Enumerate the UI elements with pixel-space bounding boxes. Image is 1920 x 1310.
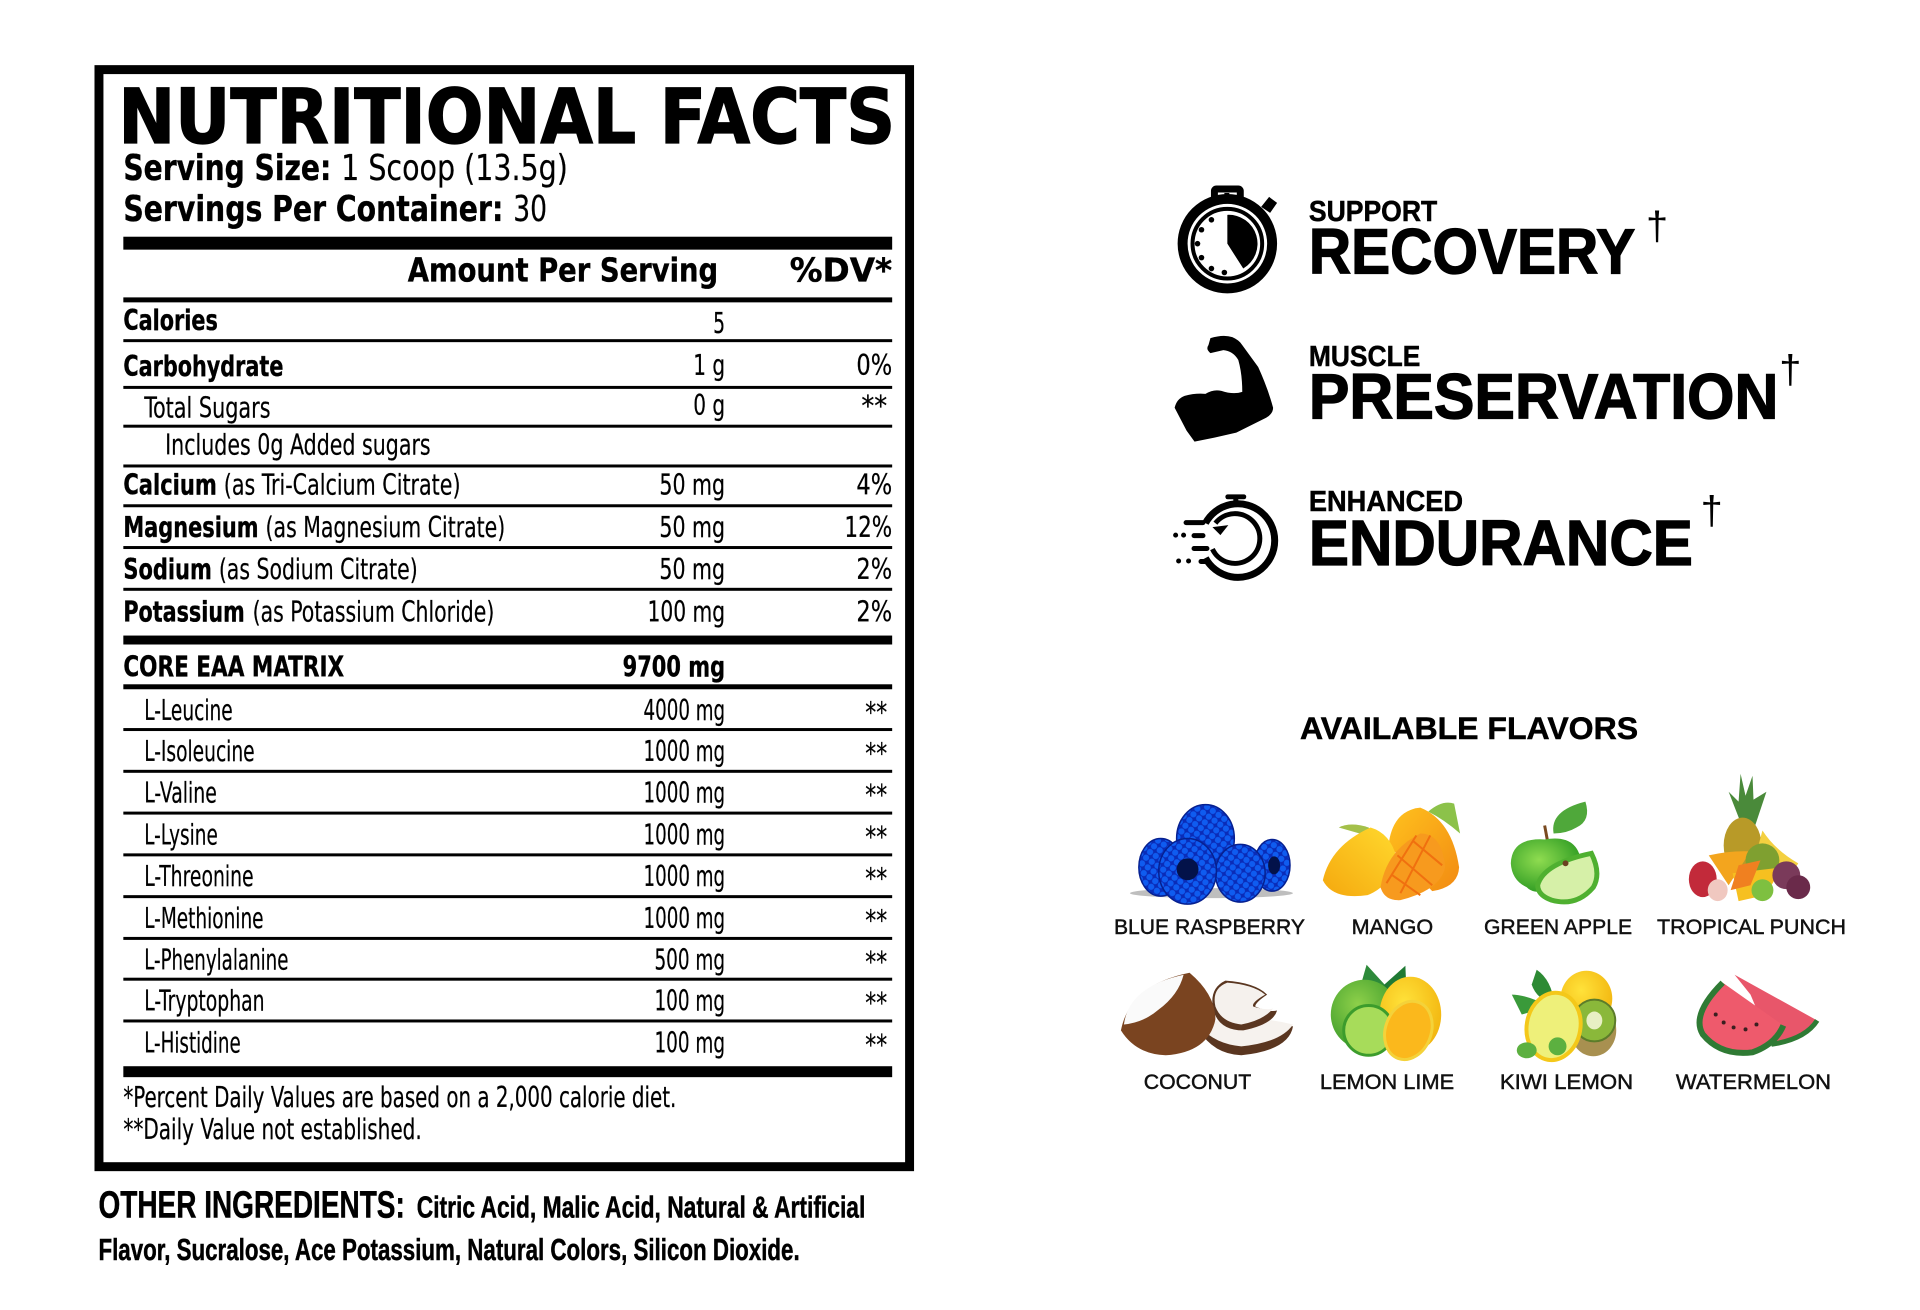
- benefit: support recovery: SUPPORT: [1309, 196, 1438, 228]
- core EAA matrix rows: L-Valine: [144, 776, 217, 810]
- serving info: [123, 148, 568, 230]
- table header: [408, 251, 892, 289]
- panel: nutritional facts: [99, 70, 910, 1167]
- core EAA matrix rows: L-Leucine: [144, 693, 233, 727]
- label: watermelon: WATERMELON: [1676, 1071, 1831, 1094]
- core EAA matrix rows: **: [865, 861, 887, 895]
- core EAA matrix rows: **: [865, 819, 887, 853]
- icon: stopwatch: [1183, 189, 1277, 288]
- nutrient rows: **: [861, 389, 887, 423]
- other ingredients: Flavor, Sucralose, Ace Potassium, Natural Colors, Silicon Dioxide.: [98, 1232, 800, 1267]
- core EAA matrix rows: **: [865, 986, 887, 1020]
- icon: blue raspberry: [1130, 805, 1293, 904]
- nutrient rows: (as Magnesium Citrate): [266, 510, 505, 544]
- nutrient rows: 2%: [856, 552, 892, 586]
- core EAA matrix rows: L-Methionine: [144, 901, 264, 935]
- footnotes: [123, 1080, 676, 1146]
- icon: green apple: [1511, 802, 1597, 902]
- nutrient rows: 4%: [856, 467, 892, 501]
- benefit: enhanced endurance: †: [1701, 489, 1723, 533]
- benefit: enhanced endurance: ENDURANCE: [1309, 508, 1693, 579]
- label: coconut: COCONUT: [1144, 1071, 1251, 1094]
- core EAA matrix rows: [123, 649, 887, 1061]
- other ingredients: Citric Acid, Malic Acid, Natural & Artificial: [417, 1189, 865, 1224]
- nutrient rows: Total Sugars: [143, 391, 271, 425]
- nutrient rows: Sodium: [123, 552, 212, 586]
- nutrient rows: Magnesium: [123, 510, 259, 544]
- core EAA matrix rows: 1000 mg: [644, 859, 725, 893]
- label: blue raspberry: BLUE RASPBERRY: [1114, 916, 1305, 939]
- core EAA matrix rows: 1000 mg: [644, 776, 725, 810]
- nutrient rows: Includes 0g Added sugars: [165, 428, 431, 462]
- other ingredients: [98, 1184, 865, 1267]
- benefit: enhanced endurance: ENHANCED: [1309, 486, 1463, 518]
- serving info: 30: [513, 189, 547, 230]
- core EAA matrix rows: **: [865, 903, 887, 937]
- serving info: 1 Scoop (13.5g): [341, 148, 568, 189]
- icon: endurance timer: [1173, 494, 1275, 577]
- nutrient rows: 0%: [856, 348, 892, 382]
- table header: Amount Per Serving: [408, 251, 718, 289]
- core EAA matrix rows: **: [865, 736, 887, 770]
- core EAA matrix rows: 1000 mg: [644, 734, 725, 768]
- benefit: support recovery: †: [1646, 205, 1668, 249]
- core EAA matrix rows: 500 mg: [654, 943, 725, 977]
- nutrient rows: Calcium: [123, 467, 217, 501]
- icon: coconut: [1121, 973, 1293, 1055]
- nutrient rows: (as Tri-Calcium Citrate): [224, 467, 461, 501]
- label: mango: MANGO: [1352, 916, 1433, 939]
- nutrient rows: [123, 303, 892, 629]
- title: NUTRITIONAL FACTS: [118, 73, 895, 161]
- label: green apple: GREEN APPLE: [1484, 916, 1632, 939]
- nutrient rows: 1 g: [693, 348, 725, 382]
- icon: kiwi lemon: [1512, 970, 1616, 1064]
- benefit: muscle preservation: †: [1779, 348, 1801, 392]
- serving info: Servings Per Container:: [123, 189, 503, 230]
- nutrient rows: 100 mg: [647, 595, 725, 629]
- footnotes: **Daily Value not established.: [123, 1112, 422, 1146]
- core EAA matrix rows: CORE EAA MATRIX: [123, 649, 344, 683]
- heading: available flavors: AVAILABLE FLAVORS: [1300, 710, 1638, 746]
- nutrient rows: 0 g: [693, 388, 725, 422]
- icon: lemon lime: [1331, 965, 1441, 1066]
- core EAA matrix rows: 1000 mg: [644, 901, 725, 935]
- core EAA matrix rows: **: [865, 695, 887, 729]
- label: lemon lime: LEMON LIME: [1320, 1071, 1454, 1094]
- core EAA matrix rows: **: [865, 1027, 887, 1061]
- core EAA matrix rows: L-Histidine: [144, 1025, 241, 1059]
- core EAA matrix rows: 100 mg: [654, 984, 725, 1018]
- serving info: Serving Size:: [123, 148, 331, 189]
- benefit: muscle preservation: MUSCLE: [1309, 341, 1420, 373]
- table rules: [123, 237, 892, 1077]
- nutrient rows: (as Potassium Chloride): [253, 595, 494, 629]
- nutrient rows: (as Sodium Citrate): [219, 552, 418, 586]
- label: tropical punch: TROPICAL PUNCH: [1657, 916, 1846, 939]
- icon: tropical punch: [1689, 774, 1810, 901]
- nutrient rows: 50 mg: [659, 510, 725, 544]
- core EAA matrix rows: L-Lysine: [144, 817, 218, 851]
- core EAA matrix rows: 4000 mg: [644, 693, 725, 727]
- core EAA matrix rows: L-Isoleucine: [144, 734, 255, 768]
- nutrient rows: Calories: [123, 303, 218, 337]
- core EAA matrix rows: L-Threonine: [144, 859, 254, 893]
- table header: %DV*: [790, 251, 892, 289]
- other ingredients: OTHER INGREDIENTS:: [98, 1184, 405, 1226]
- nutrient rows: 5: [713, 306, 725, 340]
- nutrient rows: 2%: [856, 595, 892, 629]
- nutrient rows: Carbohydrate: [123, 349, 283, 383]
- nutrient rows: 12%: [844, 510, 892, 544]
- footnotes: *Percent Daily Values are based on a 2,000 calorie diet.: [123, 1080, 676, 1114]
- core EAA matrix rows: 9700 mg: [623, 649, 725, 683]
- core EAA matrix rows: 100 mg: [654, 1025, 725, 1059]
- core EAA matrix rows: **: [865, 778, 887, 812]
- core EAA matrix rows: **: [865, 945, 887, 979]
- benefit: support recovery: RECOVERY: [1309, 217, 1635, 288]
- nutrient rows: Potassium: [123, 595, 245, 629]
- icon: flexed arm: [1175, 336, 1273, 442]
- core EAA matrix rows: L-Tryptophan: [144, 984, 265, 1018]
- icon: watermelon: [1700, 975, 1817, 1053]
- nutrient rows: 50 mg: [659, 552, 725, 586]
- core EAA matrix rows: 1000 mg: [644, 817, 725, 851]
- core EAA matrix rows: L-Phenylalanine: [144, 943, 288, 977]
- benefit: muscle preservation: PRESERVATION: [1309, 362, 1778, 433]
- icon: mango: [1323, 803, 1460, 900]
- nutrient rows: 50 mg: [659, 467, 725, 501]
- label: kiwi lemon: KIWI LEMON: [1500, 1071, 1633, 1094]
